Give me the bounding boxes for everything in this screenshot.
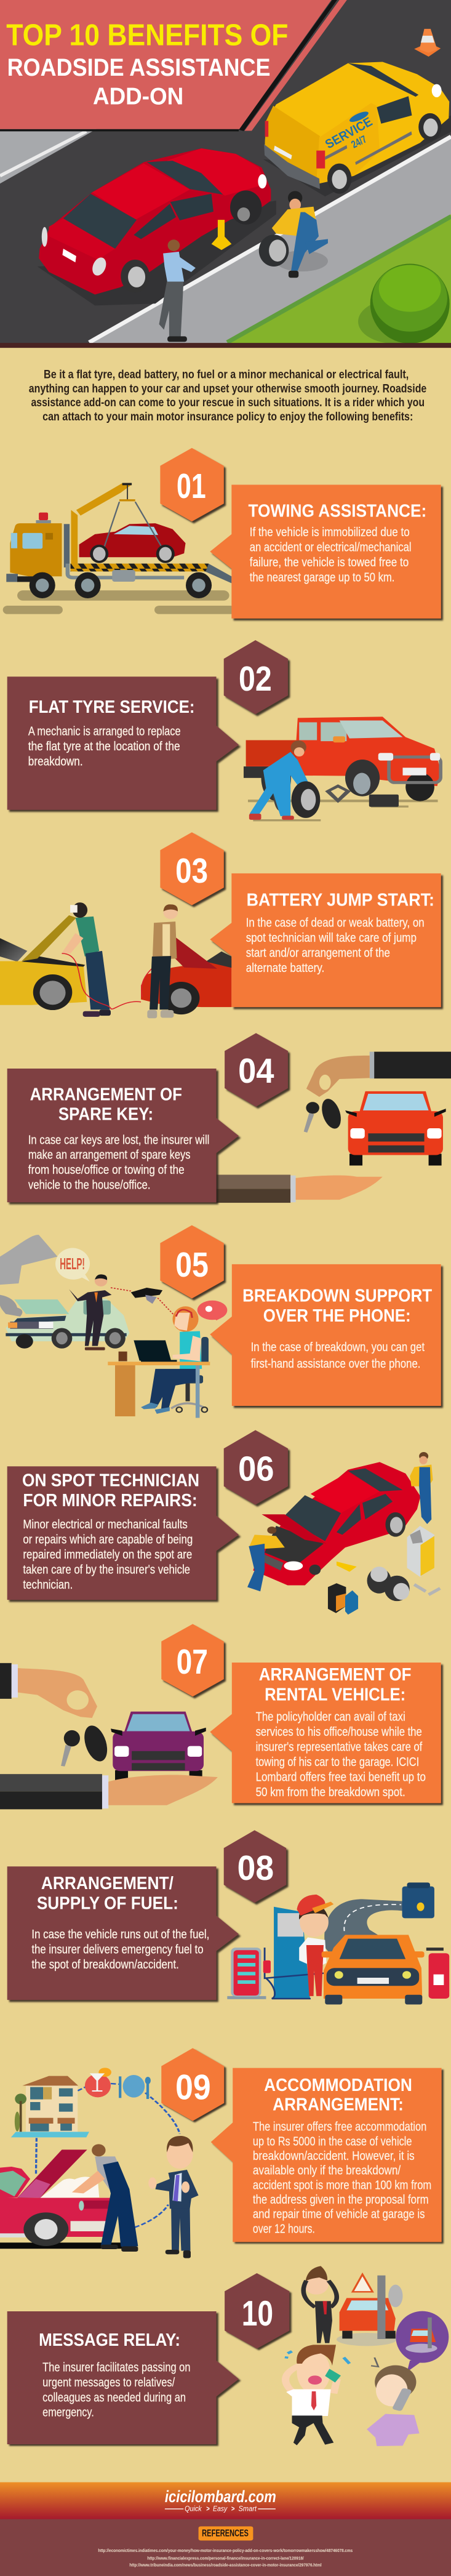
illustration: mechanic with tyre bbox=[259, 191, 328, 278]
body text: the nearest garage up to 50 km. bbox=[250, 570, 394, 584]
upper sidewalk bbox=[0, 129, 97, 183]
number hexagon 03 bbox=[160, 832, 224, 905]
number hexagon 05: 05 bbox=[175, 1245, 209, 1284]
illustration: pickup truck and mechanic bbox=[244, 716, 441, 821]
heading: ARRANGEMENT OF bbox=[30, 1084, 182, 1104]
tagline: Easy bbox=[213, 2505, 228, 2513]
brand name: icicilombard.com bbox=[165, 2487, 276, 2506]
tagline: > bbox=[231, 2505, 234, 2513]
body text: urgent messages to relatives/ bbox=[42, 2375, 175, 2389]
body text bbox=[42, 2361, 190, 2420]
body text: breakdown. bbox=[28, 754, 83, 768]
illustration: phone breakdown support: HELP! bbox=[60, 1255, 85, 1273]
heading: FOR MINOR REPAIRS: bbox=[23, 1490, 198, 1510]
heading: ARRANGEMENT OF bbox=[259, 1664, 412, 1685]
heading: RENTAL VEHICLE: bbox=[265, 1684, 405, 1704]
body text: emergency. bbox=[42, 2405, 94, 2420]
title: ROADSIDE ASSISTANCE bbox=[7, 54, 270, 81]
heading bbox=[22, 1470, 199, 1510]
body text: the flat tyre at the location of the bbox=[28, 739, 180, 753]
heading: MESSAGE RELAY: bbox=[39, 2330, 180, 2350]
body text bbox=[23, 1517, 193, 1592]
body text: over 12 hours. bbox=[253, 2221, 315, 2236]
number hexagon 02: 02 bbox=[239, 659, 272, 698]
number hexagon 03: 03 bbox=[175, 851, 208, 890]
sections 05 and 06 bbox=[0, 1225, 441, 1615]
sections 07 and 08 bbox=[0, 1624, 449, 2005]
number hexagon 01: 01 bbox=[177, 467, 206, 505]
illustration: battery jump start bbox=[0, 902, 231, 1018]
body text bbox=[253, 2120, 431, 2236]
illustration: phone breakdown support bbox=[0, 1235, 227, 1418]
body text bbox=[251, 1339, 425, 1370]
references badge: REFERENCES bbox=[202, 2528, 249, 2538]
body text: Minor electrical or mechanical faults bbox=[23, 1517, 188, 1531]
panel: supply of fuel bbox=[7, 1866, 239, 2000]
illustration: mechanics repairing red car bbox=[247, 1452, 440, 1615]
number hexagon 08 bbox=[224, 1830, 286, 1903]
body text: A mechanic is arranged to replace bbox=[28, 724, 181, 738]
title: TOP 10 BENEFITS OF bbox=[6, 18, 288, 52]
number hexagon 05 bbox=[160, 1225, 224, 1298]
body text bbox=[28, 1133, 209, 1192]
illustration: red car with jack bbox=[38, 148, 276, 305]
number hexagon 06 bbox=[224, 1430, 288, 1504]
illustration: rental car key handover bbox=[0, 1663, 218, 1809]
tagline: > bbox=[206, 2505, 210, 2513]
heading bbox=[37, 1873, 178, 1913]
body text bbox=[28, 724, 181, 768]
body text: vehicle to the house/office. bbox=[28, 1178, 151, 1192]
illustration: service van: 24/7 bbox=[349, 133, 369, 151]
body text: taken care of by the insurer's vehicle bbox=[23, 1562, 190, 1576]
illustration: stressed driver and relative bbox=[285, 2266, 449, 2446]
title: ADD-ON bbox=[93, 82, 183, 110]
references badge bbox=[199, 2526, 253, 2540]
body text: or repairs which are capable of being bbox=[23, 1532, 193, 1546]
hero illustration and title bbox=[0, 0, 451, 423]
number hexagon 09 bbox=[161, 2048, 224, 2121]
reference urls: http://www.tribuneindia.com/news/business/roadside-assistance-cover-in-motor-insurance/297976.html bbox=[129, 2562, 322, 2567]
number hexagon 10: 10 bbox=[242, 2293, 273, 2333]
body text: In case the vehicle runs out of the fuel, bbox=[31, 1927, 209, 1941]
heading: SPARE KEY: bbox=[58, 1104, 153, 1124]
body text: the insurer delivers emergency fuel to bbox=[31, 1942, 204, 1956]
footer references block bbox=[0, 2519, 451, 2576]
panel: flat tyre service bbox=[7, 676, 239, 810]
lower sidewalk and grass bbox=[89, 136, 451, 343]
title bbox=[6, 18, 288, 110]
reference urls bbox=[98, 2548, 353, 2567]
divider band bbox=[0, 343, 451, 348]
heading: ARRANGEMENT/ bbox=[41, 1873, 174, 1893]
body text: repaired immediately on the spot are bbox=[23, 1547, 192, 1562]
body text bbox=[250, 524, 412, 584]
body text: The insurer facilitates passing on bbox=[42, 2361, 190, 2375]
sections 01 and 02 bbox=[3, 448, 441, 821]
illustration: spare key handover bbox=[217, 1052, 451, 1203]
number hexagon 02 bbox=[224, 640, 288, 714]
number hexagon 06: 06 bbox=[238, 1450, 274, 1488]
body text: make an arrangement of spare keys bbox=[28, 1147, 190, 1162]
panel: towing assistance bbox=[210, 484, 441, 619]
illustration: tow truck bbox=[3, 483, 235, 614]
intro paragraph bbox=[29, 368, 426, 423]
heading bbox=[264, 2076, 412, 2114]
heading bbox=[259, 1664, 412, 1704]
tagline: Quick bbox=[185, 2505, 202, 2513]
footer brand band bbox=[0, 2482, 451, 2519]
section 10 and footer bbox=[0, 2266, 451, 2576]
icon: traffic cone bbox=[414, 29, 441, 57]
number hexagon 10 bbox=[225, 2273, 289, 2349]
panel: rental vehicle bbox=[210, 1663, 441, 1803]
number hexagon 01 bbox=[160, 448, 224, 521]
heading: FLAT TYRE SERVICE: bbox=[29, 697, 194, 717]
body text: colleagues as needed during an bbox=[42, 2390, 186, 2404]
illustration: service van: SERVICE bbox=[323, 115, 375, 151]
heading: OVER THE PHONE: bbox=[263, 1306, 411, 1326]
sections 03 and 04 bbox=[0, 832, 451, 1203]
panel: battery jump start bbox=[210, 873, 441, 1007]
panel: message relay bbox=[7, 2311, 239, 2444]
illustration: fuel station attendant bbox=[227, 1882, 449, 2005]
illustration: car owner standing bbox=[159, 239, 196, 342]
illustration: service van bbox=[263, 62, 451, 196]
body text bbox=[246, 915, 425, 975]
reference urls: http://www.financialexpress.com/personal-finance/insurance-in-correct-lane/120918/ bbox=[147, 2556, 304, 2561]
panel: accommodation arrangement bbox=[211, 2068, 442, 2242]
heading bbox=[242, 1285, 432, 1326]
panel: breakdown support bbox=[210, 1264, 441, 1406]
heading: SUPPLY OF FUEL: bbox=[37, 1893, 178, 1913]
panel: on spot technician bbox=[7, 1466, 239, 1600]
number hexagon 04 bbox=[225, 1033, 288, 1107]
number hexagon 08: 08 bbox=[237, 1849, 274, 1887]
body text bbox=[256, 1709, 426, 1799]
number hexagon 09: 09 bbox=[175, 2068, 211, 2107]
body text: technician. bbox=[23, 1577, 73, 1592]
number hexagon 07: 07 bbox=[177, 1643, 208, 1681]
number hexagon 04: 04 bbox=[238, 1052, 274, 1090]
panel: spare key bbox=[7, 1069, 239, 1202]
body text: from house/office or towing of the bbox=[28, 1162, 185, 1177]
tagline: Smart bbox=[239, 2505, 257, 2513]
section 09 bbox=[0, 2048, 442, 2258]
banner: title backdrop bbox=[0, 0, 347, 131]
body text: alternate battery. bbox=[246, 960, 324, 975]
illustration: hotel and accommodation journey bbox=[0, 2068, 199, 2258]
tagline bbox=[165, 2505, 276, 2513]
body text: In case car keys are lost, the insurer will bbox=[28, 1133, 209, 1147]
heading bbox=[30, 1084, 182, 1124]
body text bbox=[31, 1927, 209, 1972]
icon: bush bbox=[358, 264, 450, 343]
heading: ON SPOT TECHNICIAN bbox=[22, 1470, 199, 1490]
number hexagon 07 bbox=[161, 1624, 224, 1696]
body text: the spot of breakdown/accident. bbox=[31, 1957, 179, 1972]
body text: start and/or arrangement of the bbox=[246, 945, 390, 960]
